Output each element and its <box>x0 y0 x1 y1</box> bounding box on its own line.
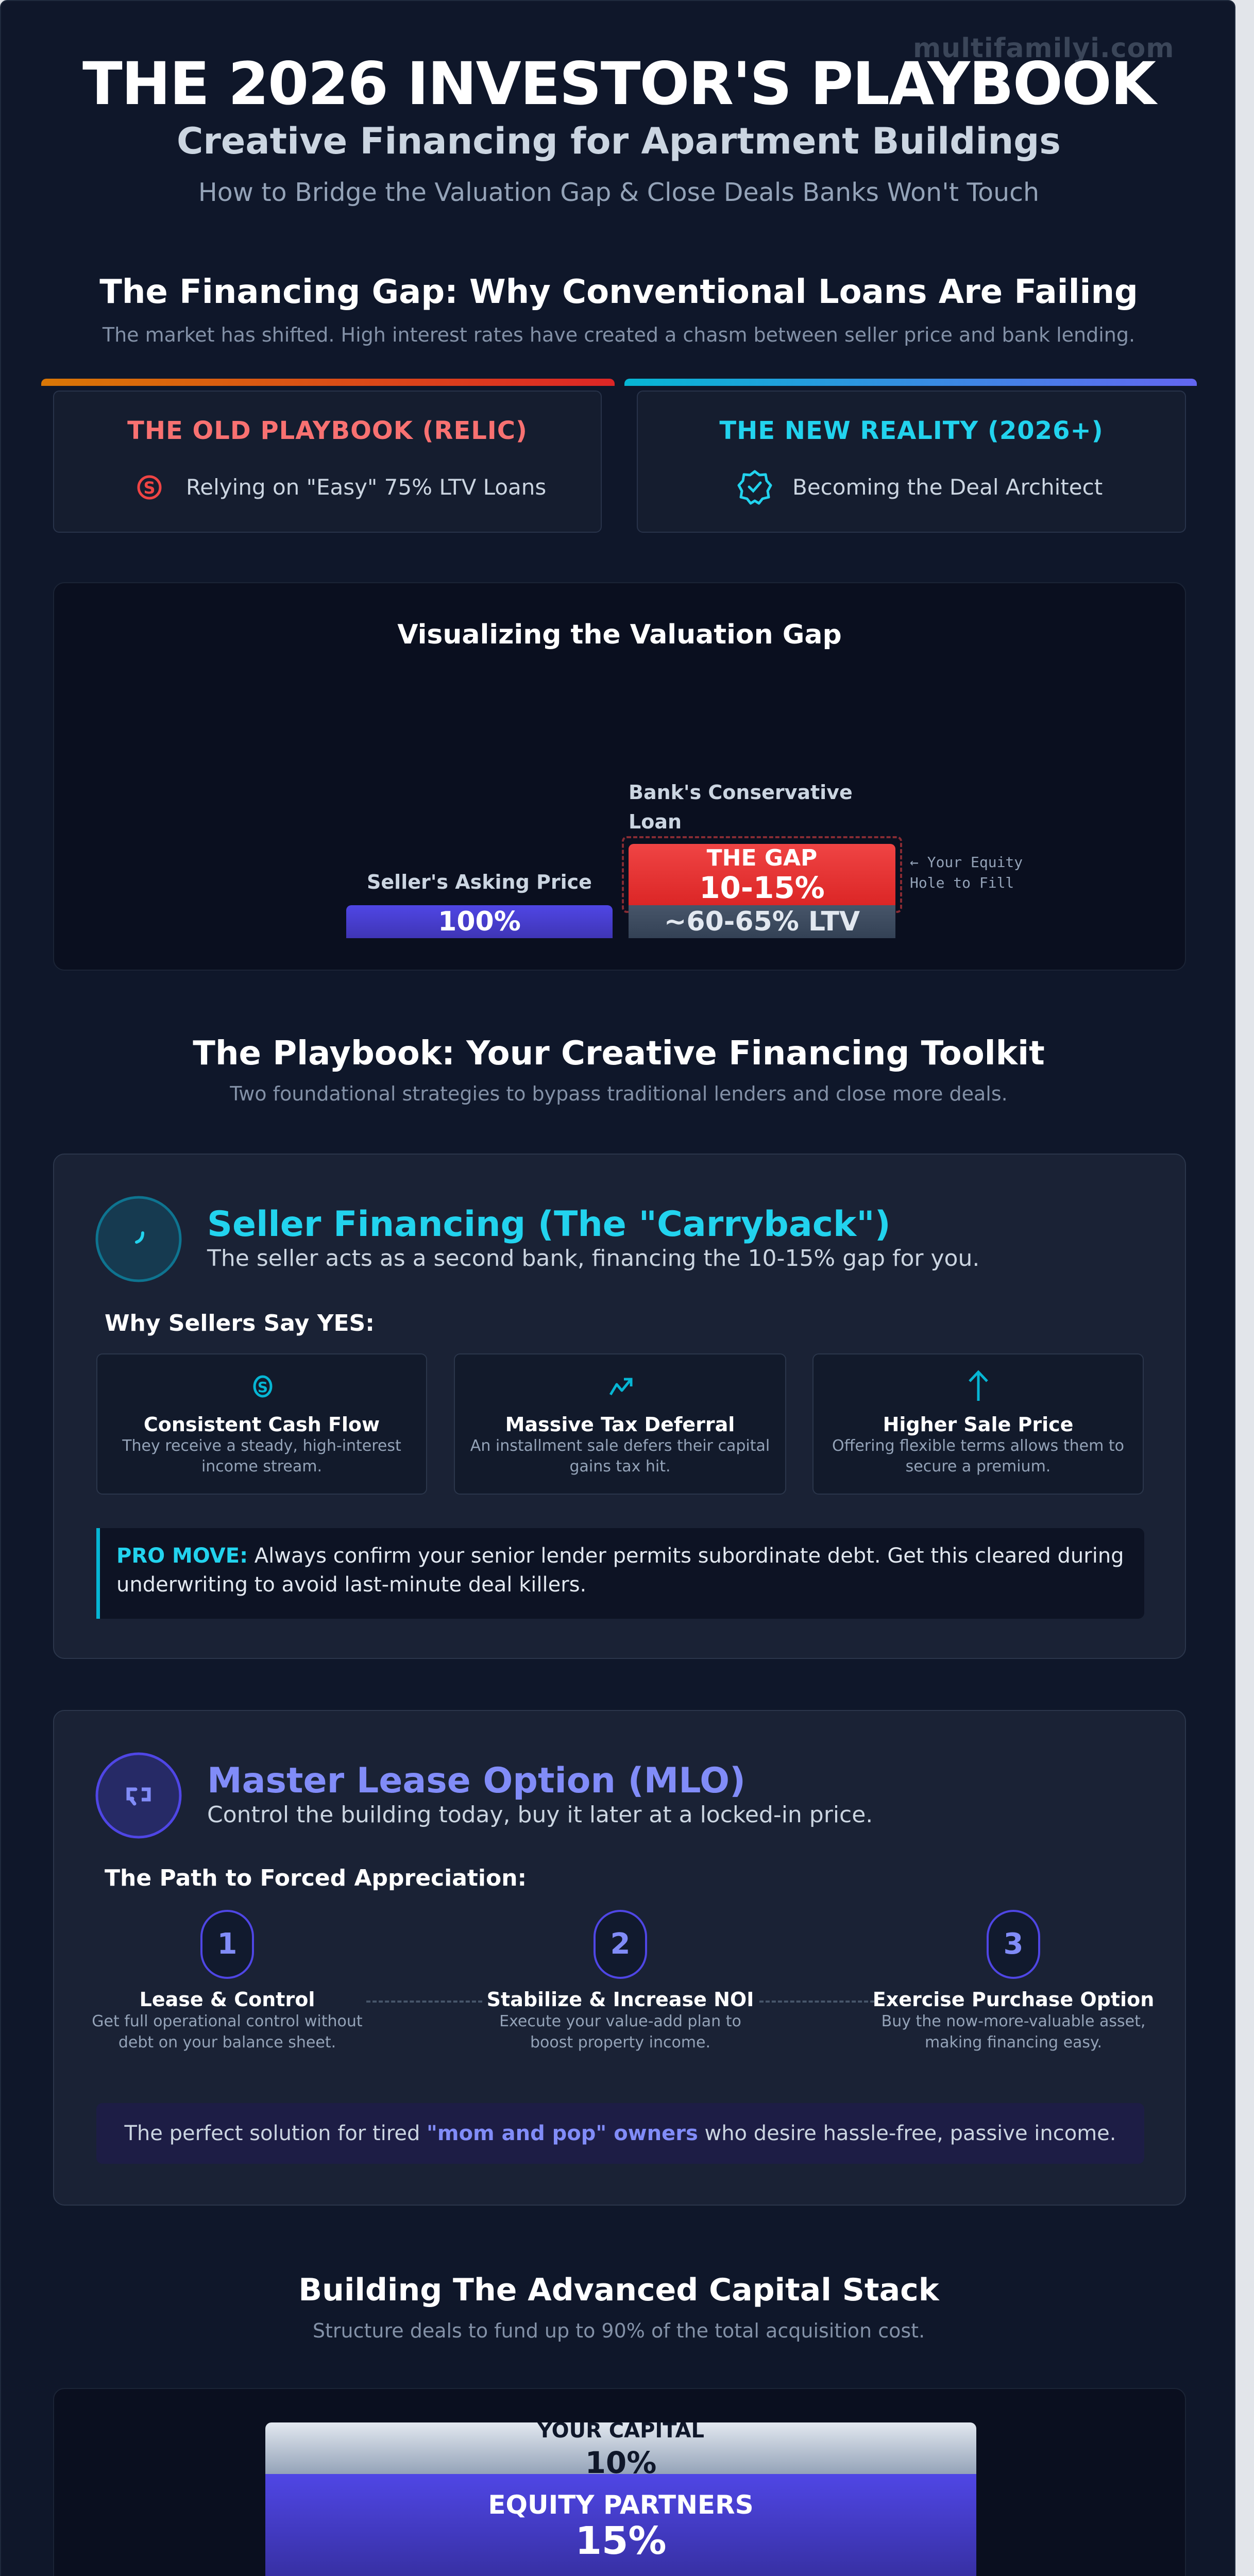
tagline: How to Bridge the Valuation Gap & Close Deals Banks Won't Touch <box>198 178 1039 207</box>
accent bar: new <box>624 379 1197 386</box>
annotation: equity hole <box>910 854 1023 891</box>
card: tax deferral: Massive Tax Deferral <box>505 1413 735 1436</box>
step 3: 3 <box>1004 1927 1023 1961</box>
icon: mlo circle <box>96 1753 181 1838</box>
step 1 <box>92 1910 363 2052</box>
icon: seller circle <box>96 1196 181 1282</box>
callout: pro move: underwriting to avoid last-minute deal killers. <box>116 1573 586 1597</box>
layer: your capital <box>265 2422 976 2474</box>
bar: 100%: 100% <box>438 906 521 937</box>
icon: arrow up <box>969 1370 988 1401</box>
bar: ltv: ~60-65% LTV <box>664 906 860 937</box>
step 1: Get full operational control without <box>92 2012 363 2030</box>
label: bank loan: Loan <box>629 810 682 833</box>
text: old item: Relying on "Easy" 75% LTV Loans <box>186 474 546 500</box>
card: tax deferral: An installment sale defers their capital <box>470 1437 770 1455</box>
icon: dollar: S <box>258 1379 268 1396</box>
panel: old playbook <box>53 391 602 533</box>
heading: why sellers: Why Sellers Say YES: <box>105 1310 375 1336</box>
text: capital sub: Structure deals to fund up to 90% of the total acquisition cost. <box>313 2319 925 2342</box>
card: higher price: secure a premium. <box>906 1458 1050 1476</box>
card: cash flow: income stream. <box>201 1458 322 1476</box>
card: cash flow: They receive a steady, high-interest <box>122 1437 401 1455</box>
watermark: multifamilyi.com <box>913 33 1174 64</box>
heading: toolkit: The Playbook: Your Creative Financing Toolkit <box>193 1035 1045 1073</box>
step 1: debt on your balance sheet. <box>118 2033 336 2052</box>
panel: valuation gap chart <box>53 582 1186 971</box>
step 2: Stabilize & Increase NOI <box>487 1988 754 2011</box>
card: higher price: Offering flexible terms allows them to <box>832 1437 1124 1455</box>
heading: capital stack: Building The Advanced Capital Stack <box>298 2272 939 2308</box>
callout: mom and pop <box>96 2103 1144 2164</box>
step 1: 1 <box>217 1927 237 1961</box>
heading: old playbook: THE OLD PLAYBOOK (RELIC) <box>127 416 528 445</box>
step 3: Buy the now-more-valuable asset, <box>882 2012 1145 2030</box>
icon: dollar <box>137 475 162 500</box>
heading: new reality: THE NEW REALITY (2026+) <box>719 416 1104 445</box>
bar: the gap: 10-15% <box>699 870 825 905</box>
step 3: making financing easy. <box>925 2033 1102 2052</box>
bar: the gap <box>629 844 895 905</box>
text: new item: Becoming the Deal Architect <box>792 474 1103 500</box>
label: bank loan: Bank's Conservative <box>629 781 853 804</box>
callout: pro move <box>96 1528 1144 1619</box>
label: bank loan <box>629 781 853 833</box>
panel: master lease option <box>53 1710 1186 2206</box>
icon: dollar <box>253 1376 272 1397</box>
step 1: Lease & Control <box>140 1988 315 2011</box>
icon: badge check <box>738 470 772 505</box>
annotation: equity hole: Hole to Fill <box>910 874 1014 891</box>
card: higher price <box>812 1353 1144 1495</box>
heading: financing gap: The Financing Gap: Why Conventional Loans Are Failing <box>99 273 1138 311</box>
card: tax deferral: gains tax hit. <box>569 1458 671 1476</box>
title: THE 2026 INVESTOR'S PLAYBOOK <box>82 49 1155 118</box>
heading: path: The Path to Forced Appreciation: <box>105 1865 527 1891</box>
text: mlo sub: Control the building today, buy it later at a locked-in price. <box>207 1802 873 1828</box>
text: seller sub: The seller acts as a second bank, financing the 10-15% gap for you. <box>207 1245 979 1272</box>
bar: the gap: THE GAP <box>707 845 817 871</box>
panel: seller financing <box>53 1154 1186 1659</box>
heading: visualizing gap: Visualizing the Valuation Gap <box>397 619 842 650</box>
connector 2 <box>759 2001 874 2003</box>
heading: mlo: Master Lease Option (MLO) <box>207 1760 745 1801</box>
bar: 100% <box>346 905 613 938</box>
panel: new reality <box>637 391 1186 533</box>
label: seller asking price: Seller's Asking Price <box>367 871 592 893</box>
layer: equity partners: 15% <box>575 2519 667 2563</box>
callout: pro move: PRO MOVE: Always confirm your senior lender permits subordinate debt. Get this cleared during <box>116 1544 1124 1568</box>
icon: dollar: S <box>143 478 156 498</box>
layer: equity partners: EQUITY PARTNERS <box>488 2490 754 2520</box>
connector 1 <box>366 2001 482 2003</box>
annotation: equity hole: ← Your Equity <box>910 854 1023 871</box>
step 2: Execute your value-add plan to <box>499 2012 741 2030</box>
text: market shifted: The market has shifted. High interest rates have created a chasm between seller price and bank lending. <box>103 324 1135 346</box>
step 2: 2 <box>611 1927 630 1961</box>
text: toolkit sub: Two foundational strategies to bypass traditional lenders and close more deals. <box>230 1082 1008 1105</box>
card: cash flow: Consistent Cash Flow <box>144 1413 380 1436</box>
stack chart <box>265 2422 976 2576</box>
card: higher price: Higher Sale Price <box>883 1413 1073 1436</box>
panel: capital stack <box>53 2388 1186 2576</box>
accent bar: old <box>41 379 615 386</box>
step 3: Exercise Purchase Option <box>873 1988 1154 2011</box>
callout: mom and pop: The perfect solution for tired "mom and pop" owners who desire hassle-free, passive income. <box>125 2122 1116 2145</box>
dashed gap outline <box>622 836 902 913</box>
subtitle: Creative Financing for Apartment Buildings <box>177 120 1061 162</box>
step 2: boost property income. <box>530 2033 710 2052</box>
layer: equity partners <box>265 2474 976 2576</box>
step 3 <box>873 1910 1154 2052</box>
icon: trend up <box>609 1378 633 1395</box>
heading: seller financing: Seller Financing (The "Carryback") <box>207 1204 891 1245</box>
card: cash flow <box>96 1353 427 1495</box>
card: tax deferral <box>454 1353 786 1495</box>
step 2 <box>487 1910 754 2052</box>
bar: ltv <box>629 905 895 938</box>
